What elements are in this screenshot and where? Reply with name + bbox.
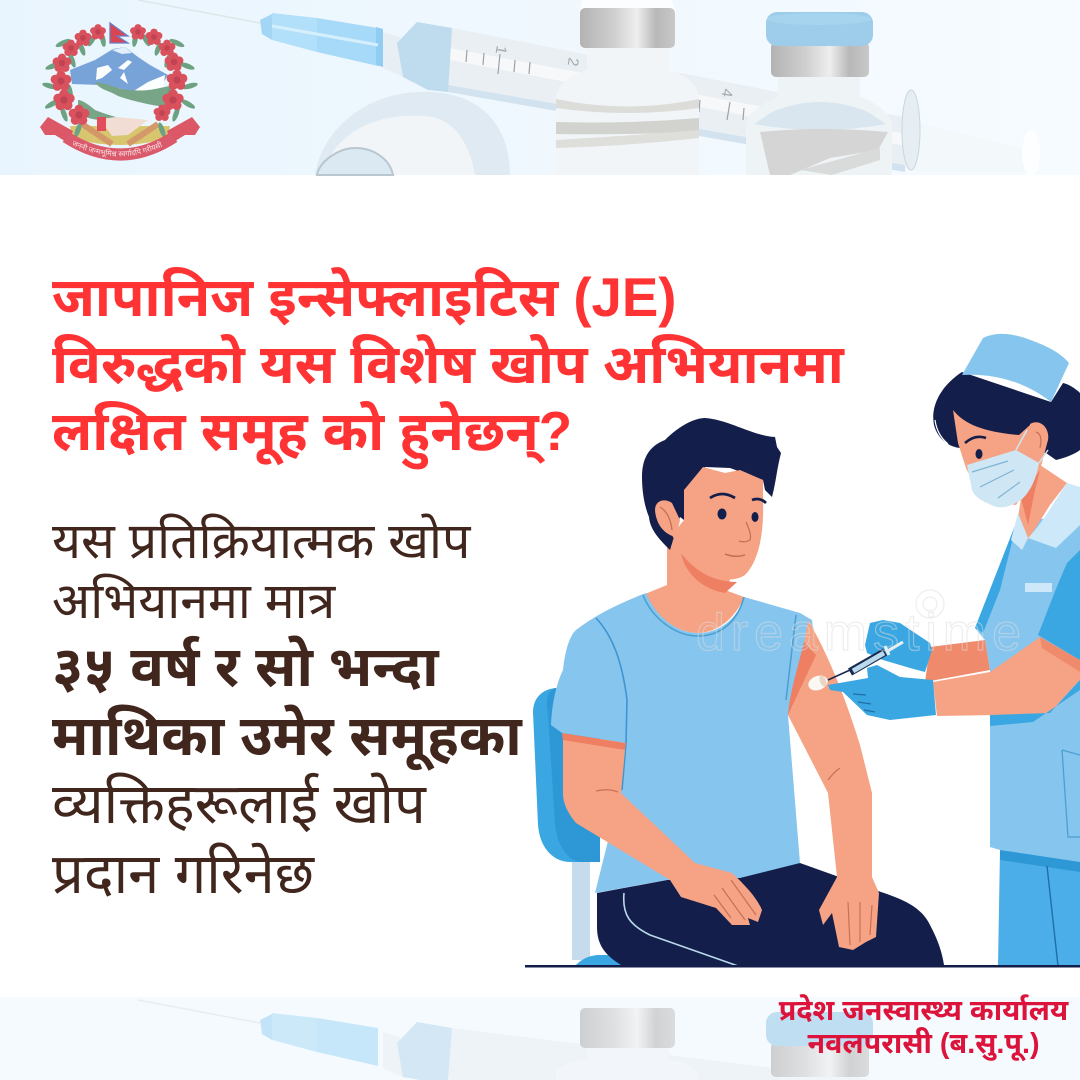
syringe xyxy=(138,0,1040,176)
body text: target age group: ३५ वर्ष र सो भन्दा xyxy=(52,635,440,698)
floor line xyxy=(525,965,1080,968)
patient left arm and hand xyxy=(563,740,762,925)
nurse sleeve xyxy=(1038,550,1080,660)
blue-capped vial xyxy=(746,12,892,175)
icon: Nepal government emblem xyxy=(40,22,200,161)
title: question heading: जापानिज इन्सेफ्लाइटिस (JE) xyxy=(52,267,676,328)
nurse neck xyxy=(1018,465,1067,540)
title: question heading xyxy=(52,267,845,470)
syringe: 4 xyxy=(718,87,736,98)
syringe and swab xyxy=(806,642,903,693)
nurse trousers xyxy=(998,850,1080,966)
nurse surgical mask xyxy=(967,430,1048,507)
emblem flag xyxy=(110,23,128,43)
bottom banner: faded syringe and vials photo xyxy=(0,997,1080,1080)
emblem rhododendron wreath xyxy=(42,24,198,138)
emblem red banner: जननी जन्मभूमिश्च स्वर्गादपि गरीयसी xyxy=(73,140,162,158)
nurse upper forearm xyxy=(925,640,990,682)
body text: target age group: यस प्रतिक्रियात्मक खोप xyxy=(52,513,472,569)
nurse gloved hands xyxy=(828,620,936,720)
emblem mountain xyxy=(70,47,168,92)
top banner: syringe and vials photo xyxy=(0,0,1080,176)
centre vial xyxy=(556,0,699,175)
emblem hills xyxy=(78,82,172,122)
footer: issuing office xyxy=(779,993,1069,1061)
body text: target age group: व्यक्तिहरूलाई खोप xyxy=(52,772,427,835)
illustration: patient and nurse xyxy=(525,334,1080,968)
body text: target age group xyxy=(52,513,523,905)
footer: issuing office: प्रदेश जनस्वास्थ्य कार्यालय xyxy=(779,993,1069,1027)
patient right arm and hand xyxy=(788,620,879,950)
lying vial xyxy=(315,92,510,175)
patient hair xyxy=(642,418,781,550)
nurse uniform xyxy=(975,518,1080,862)
nurse face xyxy=(953,410,1048,505)
emblem red banner xyxy=(40,117,200,161)
body text: target age group: प्रदान गरिनेछ xyxy=(52,842,316,905)
footer: issuing office: नवलपरासी (ब.सु.पू.) xyxy=(807,1027,1040,1061)
patient neck xyxy=(645,530,744,633)
stock watermark: dreamstime xyxy=(696,604,1021,662)
body text: target age group: माथिका उमेर समूहका xyxy=(52,704,523,771)
body text: target age group: अभियानमा मात्र xyxy=(52,573,337,629)
emblem clasped hands xyxy=(97,117,148,136)
nurse hair xyxy=(933,372,1080,460)
patient xyxy=(551,418,944,966)
chair xyxy=(533,688,625,966)
nurse lower forearm xyxy=(933,637,1080,726)
nurse collar xyxy=(1011,483,1080,550)
syringe: 2 xyxy=(564,56,582,67)
syringe: 1 xyxy=(492,44,510,55)
patient shirt xyxy=(551,593,813,893)
patient trousers xyxy=(597,863,944,966)
title: question heading: विरुद्धको यस विशेष खोप अभियानमा xyxy=(52,334,845,395)
nurse xyxy=(806,334,1080,966)
patient face xyxy=(655,467,766,579)
emblem ground and wheat xyxy=(70,124,170,145)
title: question heading: लक्षित समूह को हुनेछन्? xyxy=(52,401,572,470)
nurse cap xyxy=(962,334,1069,402)
